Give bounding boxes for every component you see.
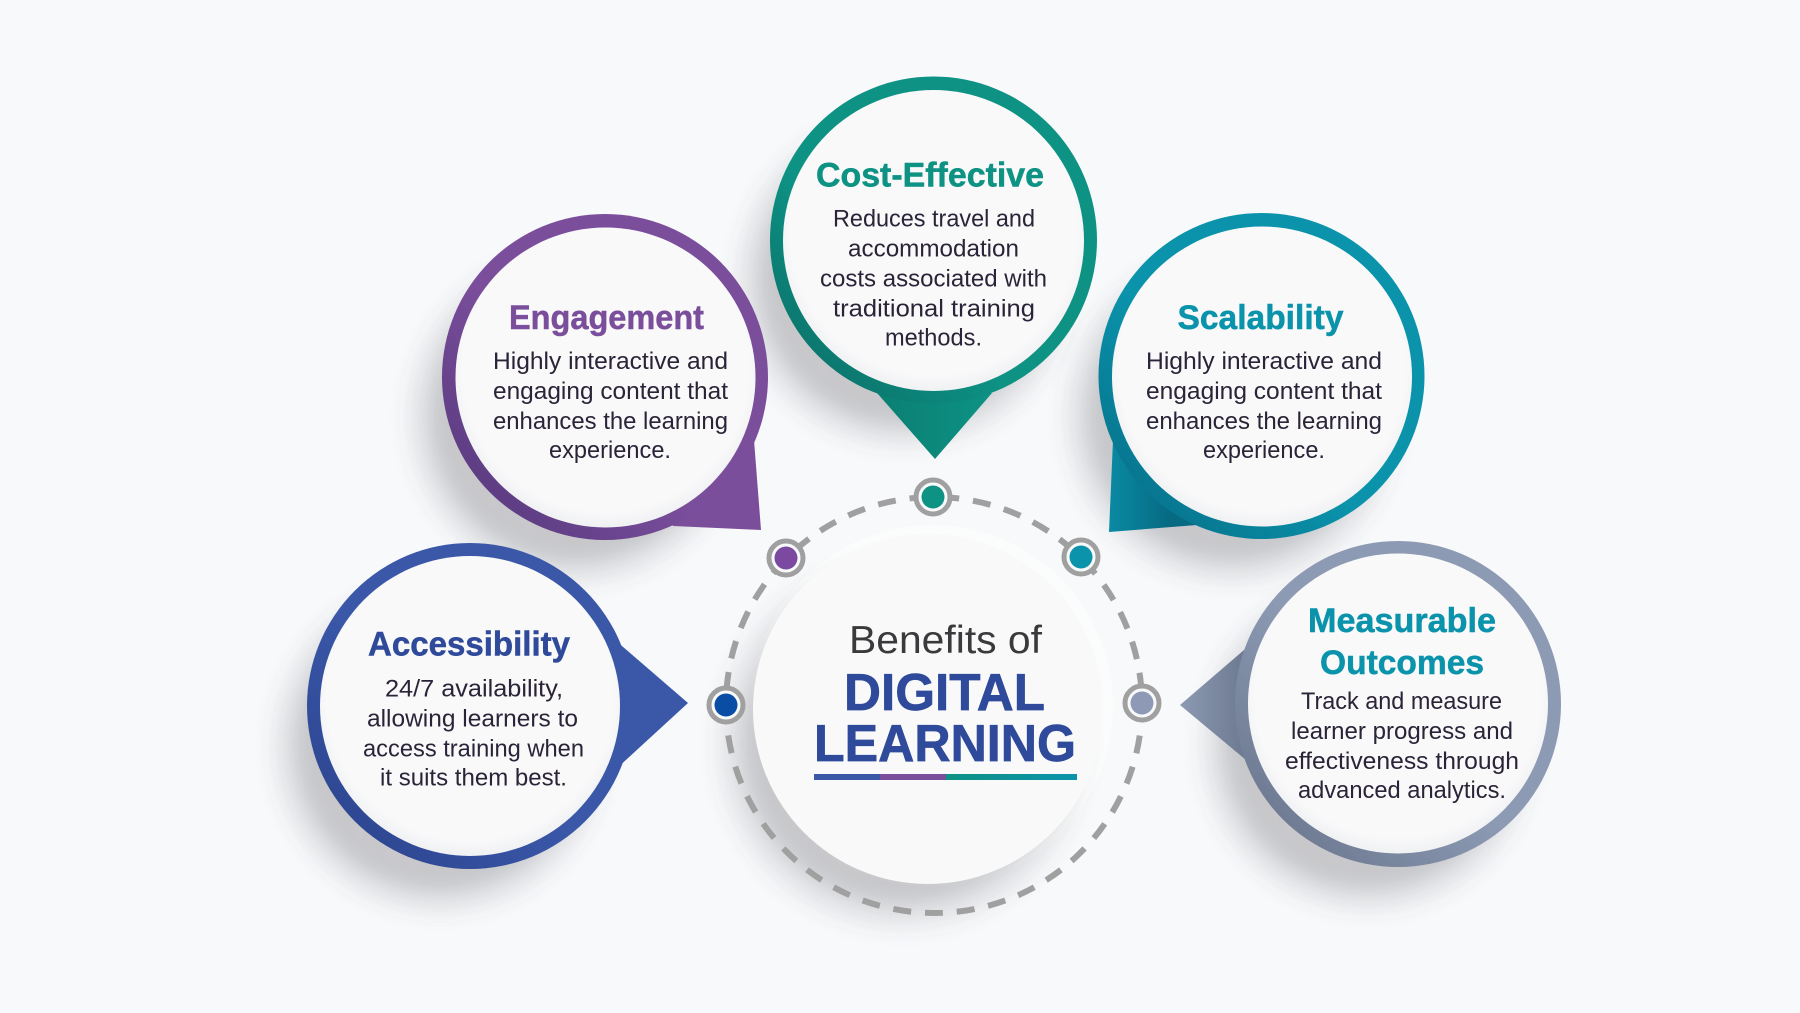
- node: engagement: [769, 541, 803, 575]
- body text: engagement: experience.: [549, 437, 671, 464]
- body text: accessibility: it suits them best.: [380, 764, 567, 792]
- node: measurable outcomes: [1125, 686, 1159, 720]
- heading: measurable outcomes: Outcomes: [1320, 644, 1484, 682]
- heading: cost-effective: Cost-Effective: [816, 156, 1044, 194]
- panel: engagement: [397, 214, 768, 595]
- pointer: accessibility: [615, 640, 688, 770]
- body text: accessibility: 24/7 availability,: [385, 676, 563, 702]
- body text: measurable outcomes: Track and measure: [1301, 688, 1502, 715]
- panel: accessibility: [262, 543, 688, 924]
- heading: scalability: Scalability: [1178, 299, 1344, 337]
- body text: measurable outcomes: learner progress and: [1291, 718, 1513, 745]
- panel: cost-effective: [726, 76, 1097, 459]
- pointer: measurable outcomes: [1180, 638, 1258, 770]
- disc: cost-effective: [783, 90, 1084, 391]
- node: accessibility: [709, 688, 743, 722]
- body text: engagement: engaging content that: [493, 378, 728, 405]
- body text: cost-effective: accommodation: [848, 236, 1019, 262]
- node: scalability: [1064, 540, 1098, 574]
- body text: cost-effective: methods.: [885, 324, 982, 352]
- title: digital learning: LEARNING: [814, 715, 1076, 773]
- ring: accessibility: [307, 543, 633, 869]
- body text: scalability: enhances the learning: [1146, 408, 1382, 435]
- node: cost-effective: [916, 480, 950, 514]
- disc: scalability: [1112, 226, 1412, 526]
- panel: measurable outcomes: [1180, 541, 1561, 922]
- heading: engagement: Engagement: [509, 299, 704, 337]
- body text: scalability: Highly interactive and: [1146, 348, 1382, 375]
- body text: accessibility: [363, 676, 584, 792]
- title: digital learning: DIGITAL: [844, 664, 1045, 722]
- central hub: [706, 497, 1142, 940]
- title: benefits of: Benefits of: [849, 619, 1042, 662]
- title: digital learning: [814, 664, 1076, 773]
- body text: engagement: enhances the learning: [493, 408, 728, 435]
- body text: accessibility: access training when: [363, 736, 584, 762]
- body text: cost-effective: costs associated with: [820, 266, 1047, 292]
- body text: engagement: [493, 348, 728, 464]
- body text: scalability: [1146, 348, 1382, 464]
- disc: engagement: [456, 228, 756, 528]
- panel: scalability: [1054, 213, 1424, 594]
- ring: cost-effective: [770, 76, 1097, 404]
- center disc: [753, 534, 1103, 884]
- pointer: engagement: [605, 377, 761, 530]
- pointer: cost-effective: [877, 393, 992, 459]
- pointer: scalability: [1109, 376, 1262, 532]
- body text: accessibility: allowing learners to: [367, 706, 578, 732]
- body text: measurable outcomes: effectiveness through: [1285, 748, 1519, 775]
- disc: measurable outcomes: [1248, 554, 1548, 854]
- body text: cost-effective: Reduces travel and: [833, 206, 1035, 232]
- tricolor underline: [814, 774, 1077, 780]
- body text: measurable outcomes: advanced analytics.: [1298, 777, 1506, 804]
- disc: accessibility: [320, 556, 620, 856]
- body text: measurable outcomes: [1285, 688, 1519, 804]
- heading: accessibility: Accessibility: [368, 626, 570, 664]
- body text: scalability: experience.: [1203, 437, 1325, 464]
- ring: measurable outcomes: [1235, 541, 1561, 867]
- body text: engagement: Highly interactive and: [493, 348, 728, 375]
- heading: measurable outcomes: [1308, 602, 1496, 682]
- heading: measurable outcomes: Measurable: [1308, 602, 1496, 640]
- body text: cost-effective: traditional training: [833, 296, 1035, 322]
- ring: scalability: [1098, 213, 1424, 539]
- dashed ring: [726, 497, 1142, 913]
- ring: engagement: [442, 214, 768, 540]
- body text: scalability: engaging content that: [1146, 378, 1382, 405]
- body text: cost-effective: [820, 206, 1047, 352]
